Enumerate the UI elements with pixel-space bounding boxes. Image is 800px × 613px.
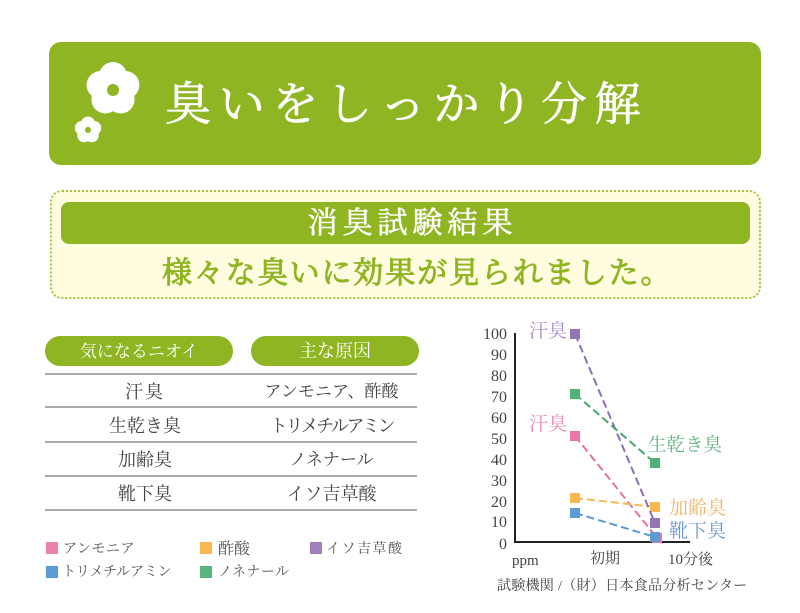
y axis labels: 20 — [491, 494, 507, 511]
title banner — [49, 42, 761, 165]
table: イソ吉草酸 — [286, 484, 376, 504]
series labels: 靴下臭 — [669, 520, 726, 542]
series: trimethylamine — [570, 508, 660, 542]
x axis labels — [512, 550, 714, 569]
table header: cause — [251, 336, 419, 366]
legend — [46, 540, 404, 580]
panel: test results — [50, 190, 761, 299]
y axis labels: 80 — [491, 368, 507, 385]
table: トリメチルアミン — [270, 416, 393, 436]
source note: 試験機関 /（財）日本食品分析センター — [497, 577, 748, 594]
table header: smell — [45, 336, 233, 366]
table: アンモニア、酢酸 — [265, 382, 398, 401]
row 3: 加齢臭 — [118, 450, 172, 470]
row 1: 汗臭 — [125, 382, 165, 402]
table header: smell: 気になるニオイ — [80, 342, 198, 361]
series labels: 汗臭 — [529, 413, 567, 435]
row 2: 生乾き臭 — [109, 416, 181, 436]
table header: cause: 主な原因 — [299, 341, 371, 361]
axes — [515, 333, 690, 542]
legend: アンモニア — [63, 542, 135, 557]
y axis labels: 0 — [499, 536, 507, 553]
y axis labels: 90 — [491, 347, 507, 364]
series: acetic acid — [570, 493, 660, 512]
x axis labels: 初期 — [590, 550, 620, 567]
series labels: 生乾き臭 — [648, 435, 722, 456]
heading bar: 消臭試験結果 — [308, 207, 518, 240]
y axis labels: 100 — [483, 326, 507, 343]
series labels: 汗臭 — [529, 320, 567, 342]
y axis labels: 60 — [491, 410, 507, 427]
x axis labels: ppm — [512, 553, 539, 569]
y axis labels: 70 — [491, 389, 507, 406]
series: isovaleric acid — [570, 329, 660, 528]
y axis labels: 50 — [491, 431, 507, 448]
y axis labels — [483, 326, 507, 553]
icon: flowers — [74, 62, 140, 142]
legend: イソ吉草酸 — [326, 542, 404, 557]
x axis labels: 10分後 — [668, 551, 714, 568]
y axis labels: 40 — [491, 452, 507, 469]
table: ノネナール — [290, 450, 373, 469]
line chart — [483, 320, 748, 594]
title text: 臭いをしっかり分解 — [165, 79, 648, 130]
legend: ノネナール — [218, 565, 290, 580]
legend: 酢酸 — [218, 541, 250, 558]
subheading: 様々な臭いに効果が見られました。 — [162, 257, 672, 290]
legend: トリメチルアミン — [62, 565, 171, 580]
row 4: 靴下臭 — [118, 484, 172, 504]
series: ammonia — [570, 431, 662, 543]
series: nonenal — [570, 389, 660, 468]
heading bar — [61, 202, 750, 244]
series labels — [529, 320, 726, 542]
series labels: 加齢臭 — [669, 497, 726, 519]
table — [45, 373, 417, 511]
y axis labels: 30 — [491, 473, 507, 490]
y axis labels: 10 — [491, 514, 507, 531]
